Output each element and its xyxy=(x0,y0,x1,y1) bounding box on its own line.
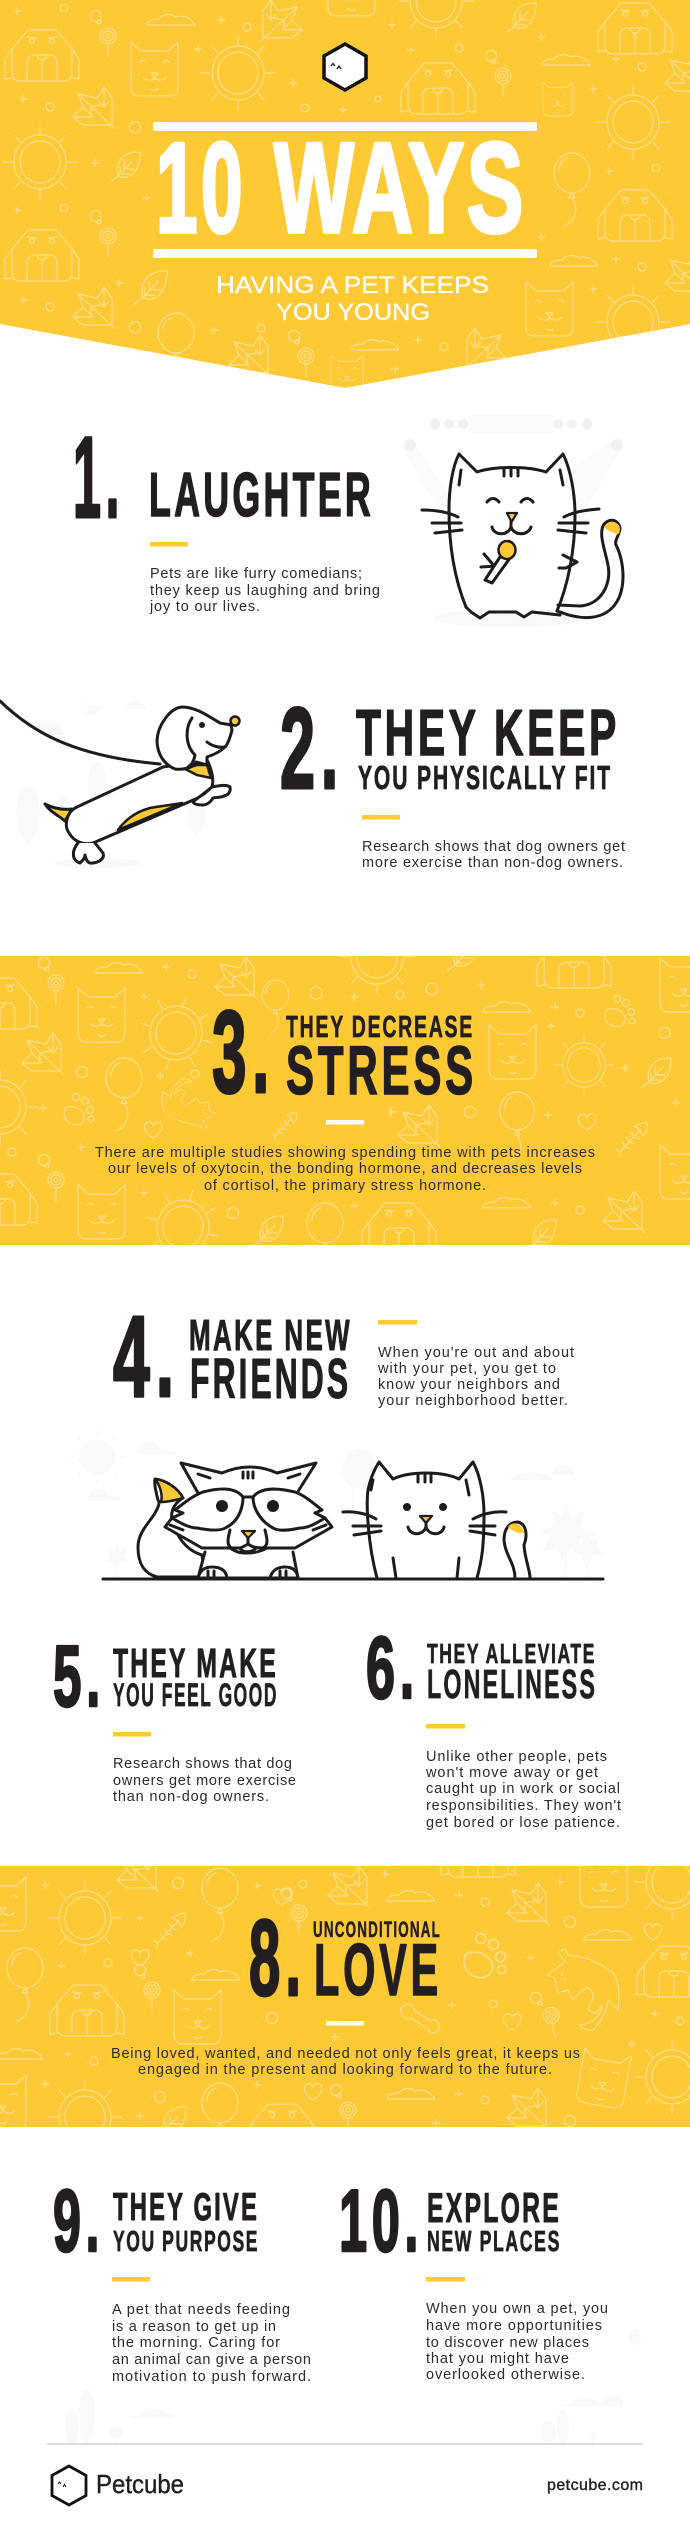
heading xyxy=(427,2184,561,2258)
illustration: raccoon and cat xyxy=(71,1431,604,1579)
heading: laughter: LAUGHTER xyxy=(149,461,374,530)
body text: won't move away or get xyxy=(425,1765,598,1781)
body text: to discover new places xyxy=(426,2335,589,2351)
heading: they keep you physically fit xyxy=(356,696,620,796)
background pattern: pet icons xyxy=(0,920,690,1276)
accent bar xyxy=(326,2021,364,2026)
section 5: they make you feel good xyxy=(53,1628,296,1805)
subtitle xyxy=(216,272,489,326)
header banner xyxy=(0,0,690,392)
accent bar xyxy=(150,542,188,546)
body text: with your pet, you get to xyxy=(377,1361,556,1377)
heading xyxy=(427,1638,597,1707)
body text xyxy=(377,1345,574,1409)
heading: unconditional love: LOVE xyxy=(314,1930,442,2011)
subtitle: YOU YOUNG xyxy=(276,299,430,326)
accent bar xyxy=(326,1120,364,1124)
heading: YOU PURPOSE xyxy=(113,2226,259,2258)
body text: know your neighbors and xyxy=(378,1377,560,1393)
number 9: 9. xyxy=(53,2171,104,2270)
section 6: they alleviate loneliness xyxy=(366,1618,621,1831)
website: petcube.com xyxy=(547,2477,643,2494)
body text: joy to our lives. xyxy=(149,599,260,615)
top rule xyxy=(153,122,537,131)
number 5: 5. xyxy=(53,1628,105,1725)
main title: 10 xyxy=(156,117,246,260)
body text: Research shows that dog owners get xyxy=(362,839,625,855)
body text: When you own a pet, you xyxy=(426,2301,608,2317)
accent bar xyxy=(426,1724,465,1728)
heading: EXPLORE xyxy=(427,2184,561,2231)
heading: THEY GIVE xyxy=(113,2186,259,2229)
body text: they keep us laughing and bring xyxy=(150,583,380,599)
body text: A pet that needs feeding xyxy=(112,2302,290,2318)
heading: NEW PLACES xyxy=(427,2226,561,2258)
accent bar xyxy=(112,2277,150,2282)
accent bar xyxy=(113,1732,151,1736)
number 2: 2. xyxy=(280,685,344,813)
number 8: 8. xyxy=(249,1897,306,2018)
body text xyxy=(112,2302,311,2385)
tail of raccoon xyxy=(138,1479,205,1577)
section 1: laughter xyxy=(73,414,623,627)
body text: Research shows that dog xyxy=(113,1756,292,1772)
section 3: decrease stress band xyxy=(0,956,690,1245)
subtitle: HAVING A PET KEEPS xyxy=(216,272,489,299)
body text xyxy=(425,1749,621,1831)
footer scenery xyxy=(65,2329,641,2445)
heading: they decrease stress xyxy=(286,1009,477,1109)
heading: THEY ALLEVIATE xyxy=(427,1638,596,1669)
body text: more exercise than non-dog owners. xyxy=(362,855,623,871)
bottom rule xyxy=(153,249,537,258)
body text: owners get more exercise xyxy=(113,1773,296,1789)
heading xyxy=(113,2186,259,2258)
body text: of cortisol, the primary stress hormone. xyxy=(204,1178,486,1194)
body text: our levels of oxytocin, the bonding hormone, and decreases levels xyxy=(108,1161,582,1177)
heading xyxy=(113,1640,278,1713)
body text: your neighborhood better. xyxy=(378,1393,568,1409)
body text xyxy=(362,839,625,871)
heading: they decrease stress: THEY DECREASE xyxy=(286,1009,474,1044)
section 10: explore new places xyxy=(339,2171,608,2383)
illustration: dachshund on a leash xyxy=(0,700,240,868)
background pattern: pet icons xyxy=(3,0,690,392)
raccoon xyxy=(198,1552,298,1578)
body text xyxy=(426,2301,608,2383)
section 4: make new friends xyxy=(71,1293,604,1579)
logo wordmark: Petcube xyxy=(96,2469,184,2499)
body text: Unlike other people, pets xyxy=(426,1749,607,1765)
number 4: 4. xyxy=(113,1293,180,1421)
main title: WAYS xyxy=(274,117,526,260)
body text xyxy=(149,566,380,615)
main title xyxy=(156,117,526,260)
footer rule xyxy=(47,2443,643,2445)
heading: unconditional love: UNCONDITIONAL xyxy=(313,1917,441,1942)
accent bar xyxy=(378,1320,417,1324)
body text: responsibilities. They won't xyxy=(426,1798,621,1814)
heading: THEY MAKE xyxy=(113,1640,278,1686)
section 9: they give you purpose xyxy=(53,2171,311,2385)
body text: an animal can give a person xyxy=(112,2352,311,2368)
body text: caught up in work or social xyxy=(426,1781,620,1797)
body text: Being loved, wanted, and needed not only feels great, it keeps us xyxy=(111,2046,580,2062)
heading: unconditional love xyxy=(313,1917,442,2011)
section 8: unconditional love band xyxy=(0,1866,690,2127)
heading: make new friends: FRIENDS xyxy=(190,1347,351,1411)
number 10: 10. xyxy=(339,2171,423,2270)
accent bar xyxy=(362,815,400,820)
illustration: cat with microphone xyxy=(403,415,623,627)
body text: engaged in the present and looking forward to the future. xyxy=(138,2062,552,2078)
number 3: 3. xyxy=(212,986,275,1117)
footer xyxy=(47,2329,643,2505)
body text: There are multiple studies showing spending time with pets increases xyxy=(95,1145,595,1161)
body text xyxy=(95,1145,595,1194)
number 6: 6. xyxy=(366,1618,419,1717)
heading: they decrease stress: STRESS xyxy=(286,1032,477,1109)
body text: that you might have xyxy=(426,2351,569,2367)
body text: When you're out and about xyxy=(378,1345,574,1361)
body text: is a reason to get up in xyxy=(112,2319,276,2335)
section 1: laughter: 1. xyxy=(73,414,124,542)
body text: have more opportunities xyxy=(426,2318,602,2334)
cat xyxy=(367,1462,484,1578)
heading: make new friends xyxy=(189,1311,352,1411)
ground line xyxy=(103,1578,603,1580)
body text xyxy=(111,2046,580,2078)
logo hexagon xyxy=(52,2466,86,2505)
background pattern: pet icons xyxy=(0,1866,690,2127)
body text: get bored or lose patience. xyxy=(426,1815,620,1831)
section 2: physically fit xyxy=(0,685,625,871)
body text: overlooked otherwise. xyxy=(426,2367,585,2383)
body text: than non-dog owners. xyxy=(113,1789,269,1805)
body text xyxy=(113,1756,296,1805)
body text: motivation to push forward. xyxy=(112,2369,311,2385)
body text: the morning. Caring for xyxy=(112,2335,280,2351)
body text: Pets are like furry comedians; xyxy=(150,566,362,582)
heading: YOU FEEL GOOD xyxy=(113,1677,278,1713)
accent bar xyxy=(426,2277,465,2282)
logo hexagon xyxy=(324,44,366,90)
heading: make new friends: MAKE NEW xyxy=(189,1311,352,1360)
